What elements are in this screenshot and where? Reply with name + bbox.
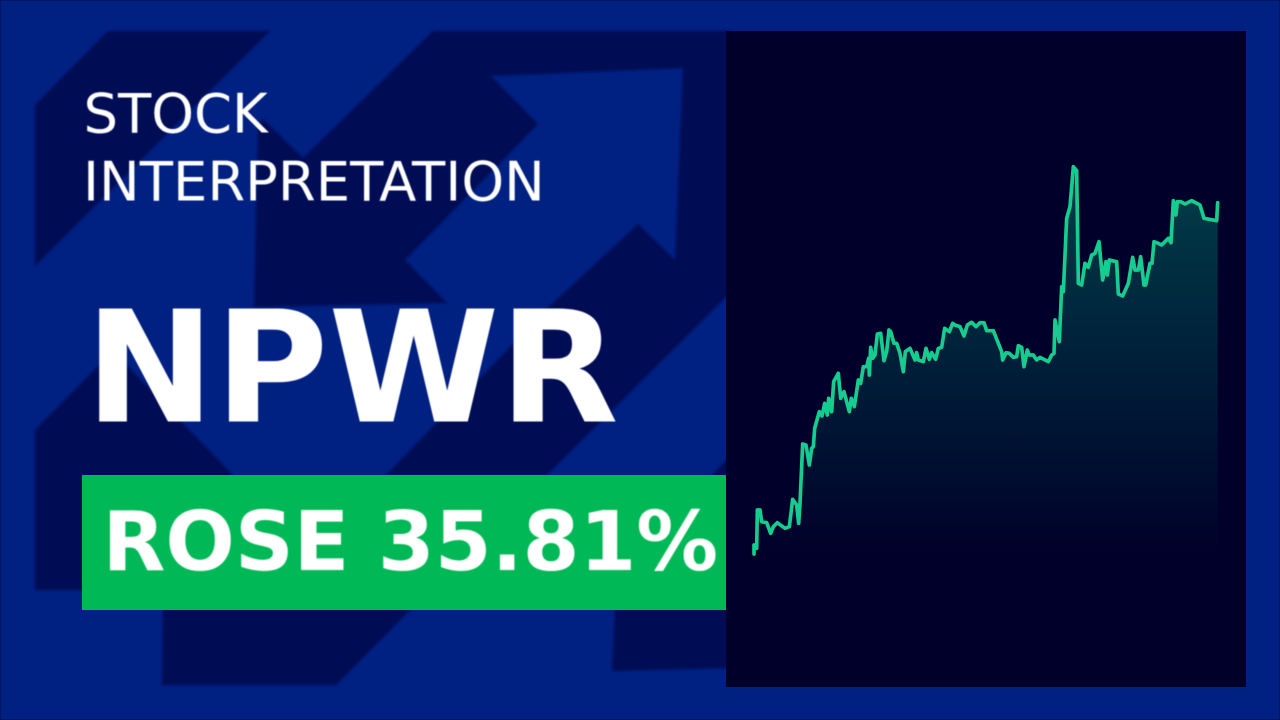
heading: stock interpretation: INTERPRETATION [83,150,545,214]
background arrow pattern [35,31,730,685]
green change banner [82,475,726,610]
area fill [754,167,1218,555]
heading: stock interpretation: STOCK [84,82,269,146]
heading: stock interpretation [83,82,545,214]
change text: ROSE 35.81% [102,495,718,590]
stock price chart [754,167,1218,555]
price line [754,167,1218,554]
chart panel [726,31,1246,687]
ticker symbol: NPWR [85,278,619,458]
